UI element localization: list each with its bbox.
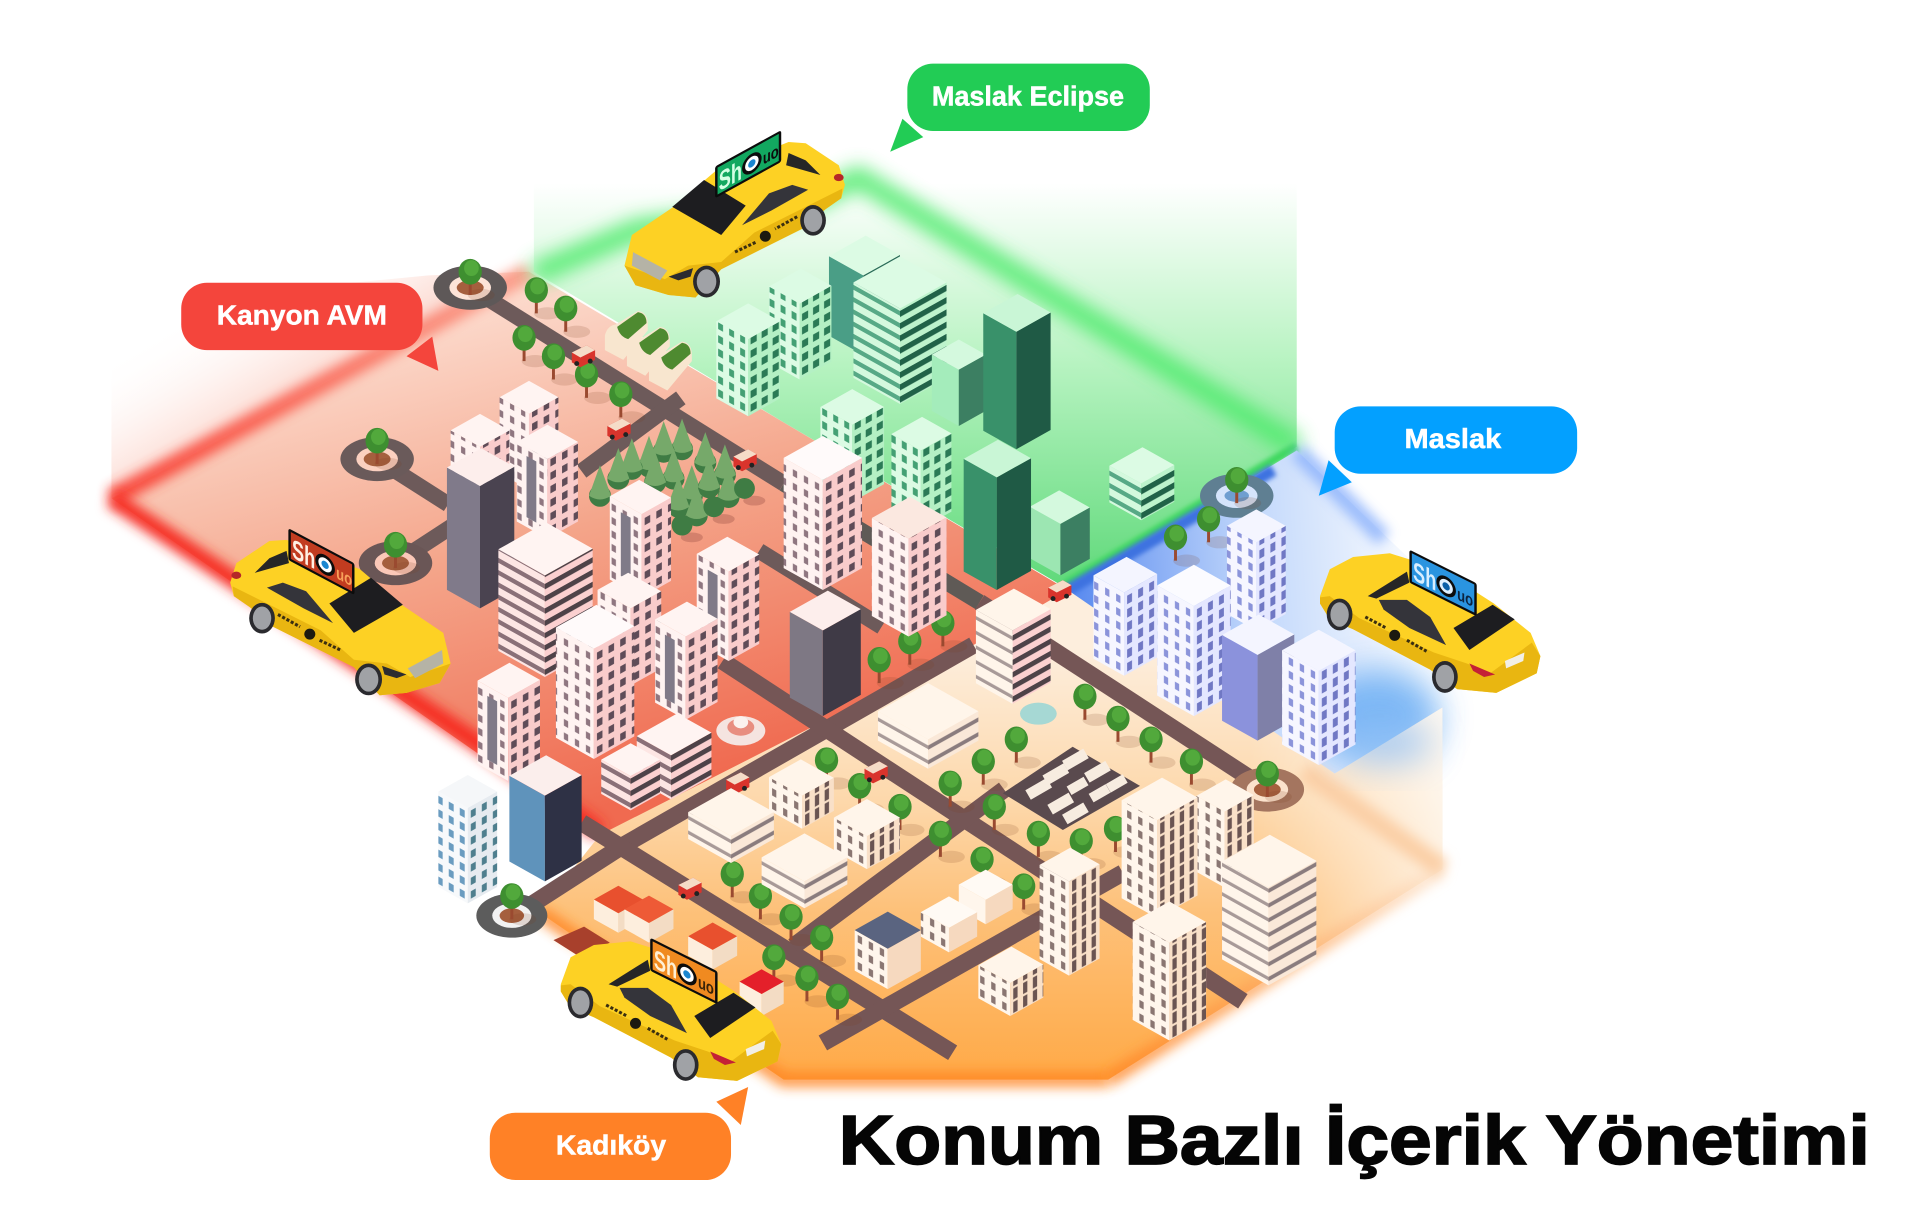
building xyxy=(716,303,780,416)
building xyxy=(769,759,834,829)
building xyxy=(1157,565,1231,716)
building xyxy=(447,448,514,608)
zone: Maslak Eclipse green ground xyxy=(534,177,1297,588)
screen: blue: uo xyxy=(1457,584,1473,611)
roundabout: blue zone xyxy=(1200,467,1273,518)
zone: Kadıköy orange ground xyxy=(539,590,1442,1080)
buildings: Kanyon AVM red district xyxy=(438,381,947,903)
taxi: bottom with orange screen xyxy=(561,938,781,1081)
callout: Maslak Eclipse: Maslak Eclipse xyxy=(932,80,1124,111)
roundabout: top xyxy=(433,259,507,310)
screen: green: Sh xyxy=(719,155,742,198)
taxi: left with red screen xyxy=(230,528,451,695)
building xyxy=(688,788,774,863)
buildings: Maslak Eclipse green district xyxy=(716,236,1174,590)
building xyxy=(1093,557,1157,676)
screen: green: uo xyxy=(763,140,779,168)
road network xyxy=(377,288,1267,1053)
building xyxy=(964,440,1031,590)
building xyxy=(451,414,509,520)
building xyxy=(1122,778,1198,918)
building xyxy=(978,947,1043,1016)
building xyxy=(1133,901,1206,1041)
building xyxy=(878,683,978,769)
building xyxy=(853,256,947,404)
taxi: right with blue screen xyxy=(1320,550,1540,693)
building xyxy=(598,573,661,686)
vehicles on roads xyxy=(572,345,1071,900)
callout: Kadıköy xyxy=(490,1087,748,1180)
building xyxy=(872,497,947,637)
roundabout: east xyxy=(1231,761,1304,812)
building xyxy=(1222,614,1294,741)
building xyxy=(610,480,671,597)
screen: red: Sh xyxy=(292,534,315,576)
building xyxy=(983,294,1051,449)
building xyxy=(1030,490,1090,575)
building xyxy=(784,436,862,590)
roundabout: south-west xyxy=(476,883,547,938)
shed xyxy=(959,870,1013,924)
building xyxy=(500,381,558,490)
roundabout: left lower xyxy=(359,532,432,585)
building xyxy=(769,269,831,379)
forest park xyxy=(589,419,765,542)
buildings: Maslak blue district xyxy=(1093,509,1356,765)
building xyxy=(517,425,578,539)
screen: red: uo xyxy=(336,562,352,590)
zone: Maslak blue ground xyxy=(1065,450,1442,774)
screen: blue: Sh xyxy=(1413,556,1436,598)
screen: red xyxy=(288,528,354,597)
house: red roof 3 xyxy=(688,922,737,970)
building xyxy=(1227,509,1286,630)
parking lot with trucks xyxy=(1003,747,1140,830)
house: red roof 2 xyxy=(624,896,673,943)
screen: orange: uo xyxy=(698,972,714,999)
screen: orange xyxy=(650,938,718,1006)
shed xyxy=(921,896,977,952)
building xyxy=(556,605,634,759)
building xyxy=(1222,835,1316,985)
roundabout: left upper xyxy=(340,428,414,481)
building xyxy=(976,589,1051,704)
building xyxy=(498,523,593,677)
pool and fountain xyxy=(716,703,1057,745)
callout: Kanyon AVM: Kanyon AVM xyxy=(217,299,387,330)
building xyxy=(438,775,497,903)
building xyxy=(762,833,847,908)
callout: Maslak Eclipse xyxy=(890,64,1150,152)
building: blue roof house xyxy=(855,912,921,989)
zone: Kanyon AVM red ground xyxy=(111,272,1068,839)
building xyxy=(932,340,986,426)
building xyxy=(820,389,884,502)
building xyxy=(790,591,861,716)
building xyxy=(1282,630,1356,765)
building xyxy=(478,663,540,781)
building xyxy=(1109,447,1174,520)
brick patch xyxy=(553,927,610,957)
callout: Kadıköy: Kadıköy xyxy=(556,1129,667,1160)
building xyxy=(601,743,660,810)
taxi: top with green screen xyxy=(624,130,845,297)
house: red roof 4 xyxy=(740,969,784,1016)
roundabouts xyxy=(340,259,1304,938)
building xyxy=(891,417,951,529)
building xyxy=(834,799,900,869)
building xyxy=(829,236,900,355)
building xyxy=(1196,779,1254,887)
screen: orange: Sh xyxy=(654,944,677,986)
callout: Maslak: Maslak xyxy=(1404,423,1502,454)
callout: Kanyon AVM xyxy=(181,283,438,371)
building xyxy=(1040,848,1100,976)
building xyxy=(697,537,759,661)
greenhouses xyxy=(605,311,692,390)
screen: green xyxy=(715,130,781,200)
building xyxy=(637,713,711,799)
title: Konum Bazlı İçerik Yönetimi xyxy=(839,1101,1870,1179)
building xyxy=(509,755,582,881)
screen: blue xyxy=(1409,550,1477,618)
callout: Maslak xyxy=(1319,406,1577,496)
street trees xyxy=(512,277,1233,1026)
house: red roof 1 xyxy=(594,886,643,933)
building xyxy=(655,602,718,720)
buildings: Kadıköy orange district xyxy=(553,589,1316,1041)
